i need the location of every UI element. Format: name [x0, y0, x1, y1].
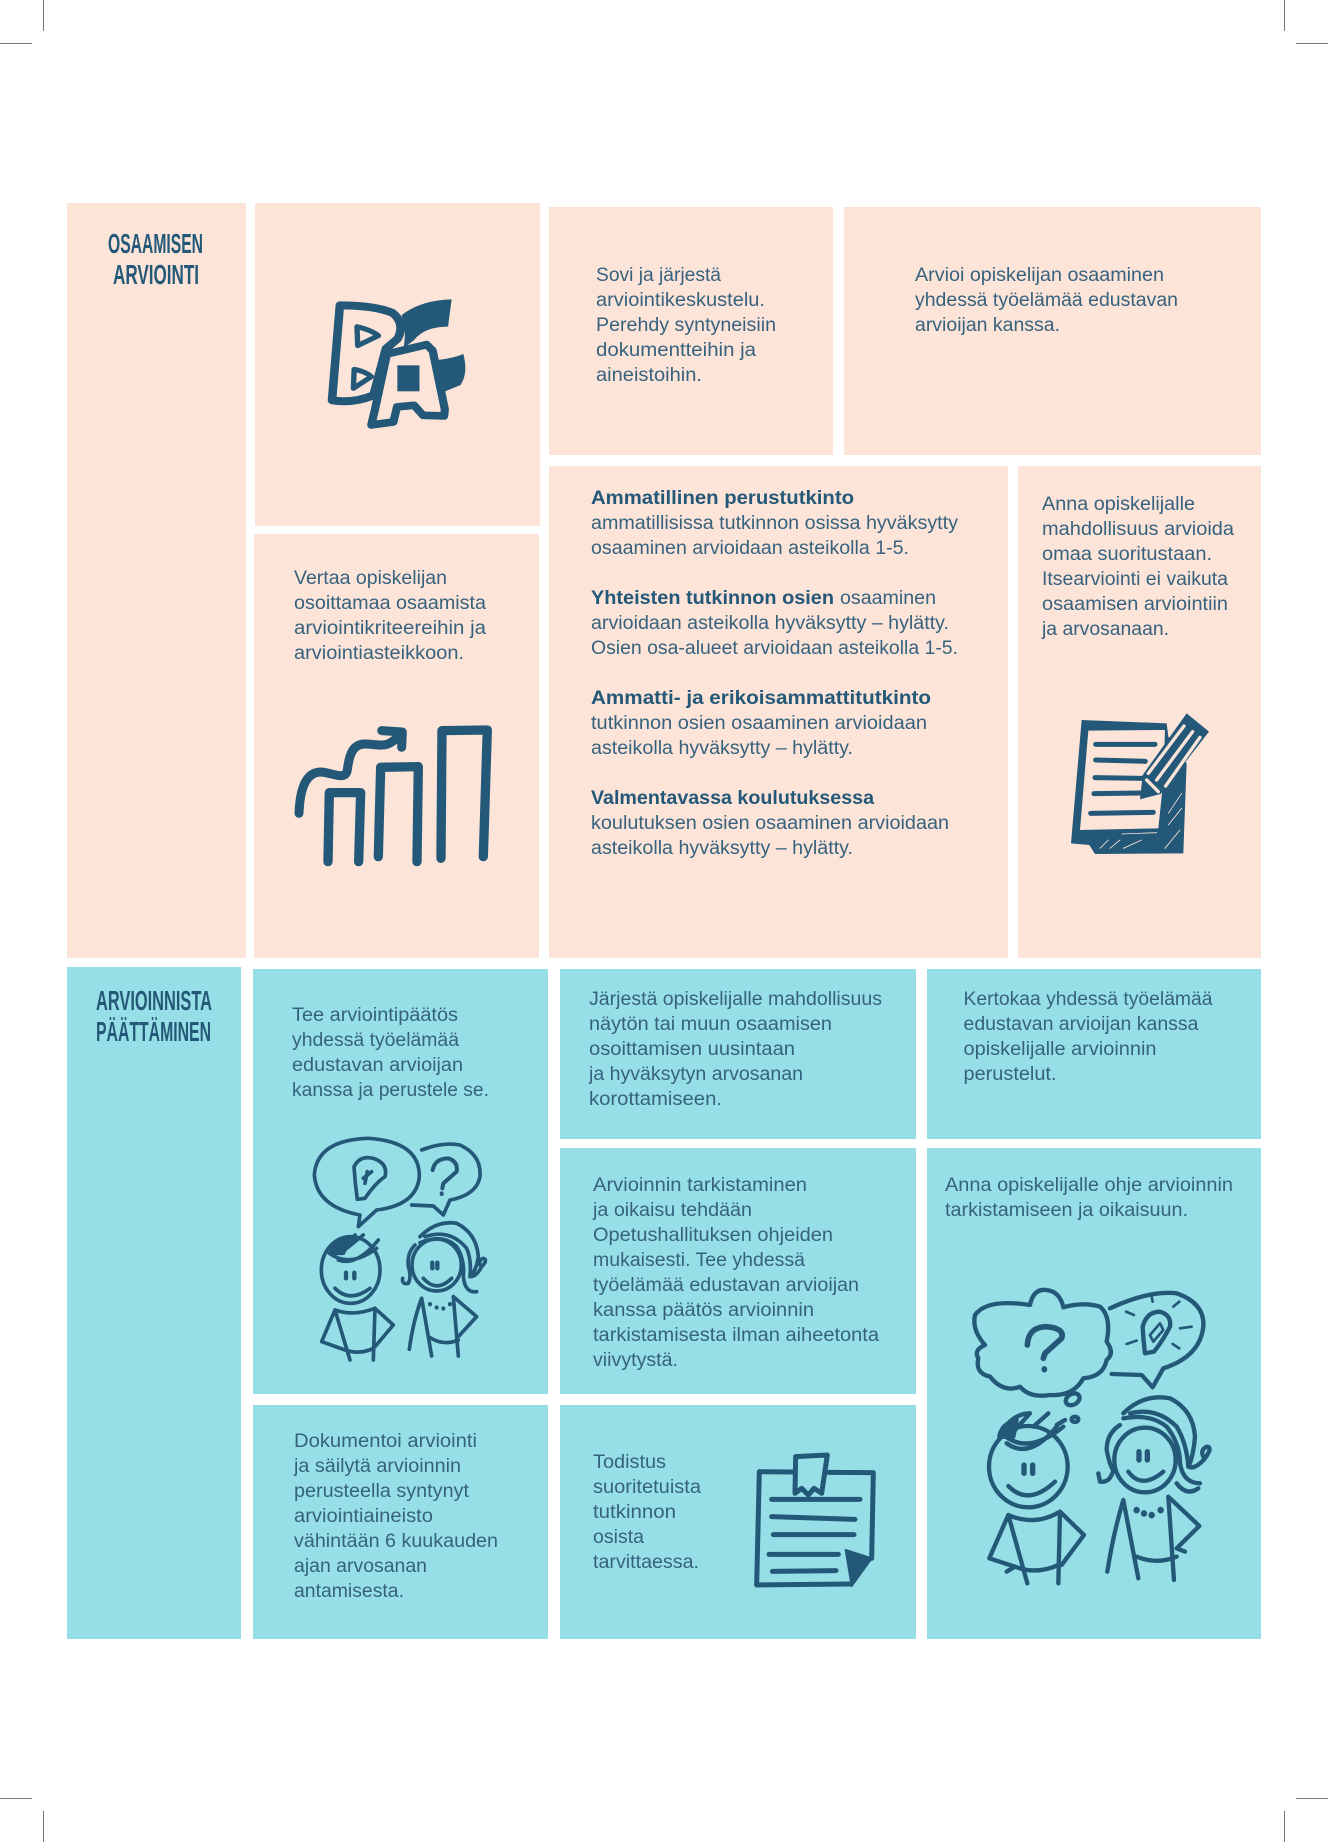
text: valmentava koulutus: koulutuksen osien osaaminen arvioidaan — [591, 813, 949, 834]
text: self-assessment: omaa suoritustaan. — [1042, 544, 1212, 565]
text: assess with working life representative: Arvioi opiskelijan osaaminen — [915, 265, 1164, 286]
text: certificate: osista — [593, 1527, 644, 1548]
text: review and correction of assessment: työelämää edustavan arvioijan — [593, 1275, 859, 1296]
text: ammatti- ja erikoisammattitutkinto — [591, 688, 931, 759]
text: document and retain assessment material: ajan arvosanan — [294, 1556, 427, 1577]
text: guidance on review and correction: tarkistamiseen ja oikaisuun. — [945, 1200, 1188, 1221]
text: agree on assessment discussion: Perehdy syntyneisiin — [596, 315, 776, 336]
text: agree on assessment discussion: Sovi ja järjestä — [596, 265, 721, 286]
panel: document and retain assessment material — [253, 1405, 548, 1639]
text: guidance on review and correction — [945, 1175, 1233, 1221]
text: make assessment decision: edustavan arvioijan — [292, 1055, 463, 1076]
text: document and retain assessment material — [293, 1431, 498, 1602]
text: ammatillinen perustutkinto — [591, 488, 959, 559]
text: make assessment decision: Tee arviointipäätös — [292, 1005, 458, 1026]
text: certificate: Todistus — [593, 1452, 666, 1473]
text: certificate: suoritetuista — [593, 1477, 701, 1498]
text: valmentava koulutus: asteikolla hyväksytty – hylätty. — [591, 838, 853, 859]
heading: osaamisen arviointi: OSAAMISEN — [108, 228, 203, 259]
icon: certificate document with ribbon — [757, 1455, 873, 1586]
panel: re-demonstration opportunity — [560, 969, 916, 1139]
text: ammatti- ja erikoisammattitutkinto: asteikolla hyväksytty – hylätty. — [591, 738, 853, 759]
text: explain grounds: Kertokaa yhdessä työelämää — [964, 989, 1213, 1010]
text: certificate — [593, 1452, 701, 1573]
text: yhteiset tutkinnon osat — [591, 588, 958, 659]
text: review and correction of assessment — [592, 1175, 879, 1371]
icon: letters B and A — [332, 299, 465, 425]
panel: compare to criteria — [254, 534, 539, 958]
text: agree on assessment discussion: dokumentteihin ja — [596, 340, 756, 361]
heading: arvioinnista paattaminen: PÄÄTTÄMINEN — [96, 1016, 211, 1047]
icon: notepad and pencil — [1071, 713, 1209, 854]
panel: guidance on review and correction — [927, 1148, 1261, 1639]
panel: explain grounds — [927, 969, 1261, 1139]
text: document and retain assessment material: antamisesta. — [294, 1581, 404, 1602]
text: document and retain assessment material: perusteella syntynyt — [294, 1481, 470, 1502]
panel: certificate — [560, 1405, 916, 1639]
text: guidance on review and correction: Anna opiskelijalle ohje arvioinnin — [945, 1175, 1233, 1196]
icon: rising bar chart with arrow — [299, 730, 487, 862]
heading: arvioinnista paattaminen: ARVIOINNISTA — [96, 985, 212, 1016]
text: review and correction of assessment: tarkistamisesta ilman aiheetonta — [593, 1325, 879, 1346]
text: document and retain assessment material: arviointiaineisto — [294, 1506, 433, 1527]
icon: two people with thought and speech bubbles — [974, 1290, 1210, 1583]
text: ammatillinen perustutkinto: Ammatillinen perustutkinto — [591, 488, 854, 509]
text: assess with working life representative: arvioijan kanssa. — [915, 315, 1060, 336]
text: self-assessment: mahdollisuus arvioida — [1042, 519, 1234, 540]
text: explain grounds: edustavan arvioijan kanssa — [964, 1014, 1199, 1035]
panel: self-assessment — [1018, 466, 1261, 958]
text: review and correction of assessment: ja oikaisu tehdään — [592, 1200, 752, 1221]
text: review and correction of assessment: kanssa päätös arvioinnin — [593, 1300, 814, 1321]
text: review and correction of assessment: mukaisesti. Tee yhdessä — [593, 1250, 805, 1271]
text: compare to criteria — [294, 568, 486, 664]
text: explain grounds: perustelut. — [964, 1064, 1056, 1085]
text: document and retain assessment material: Dokumentoi arviointi — [294, 1431, 477, 1452]
text: ammatillinen perustutkinto: osaaminen arvioidaan asteikolla 1-5. — [591, 538, 909, 559]
text: review and correction of assessment: Opetushallituksen ohjeiden — [593, 1225, 833, 1246]
text: agree on assessment discussion — [596, 265, 776, 386]
text: self-assessment — [1041, 494, 1234, 640]
panel: grade letters icon — [255, 203, 540, 526]
text: assess with working life representative — [915, 265, 1178, 336]
panel: agree on assessment discussion — [549, 207, 833, 455]
text: explain grounds — [964, 989, 1213, 1085]
panel: osaamisen arviointi heading — [67, 203, 246, 958]
text: re-demonstration opportunity: ja hyväksytyn arvosanan — [588, 1064, 803, 1085]
text: document and retain assessment material: ja säilytä arvioinnin — [293, 1456, 461, 1477]
panel: assess with working life representative — [844, 207, 1261, 455]
text: compare to criteria: Vertaa opiskelijan — [294, 568, 447, 589]
text: valmentava koulutus: Valmentavassa koulutuksessa — [591, 788, 874, 809]
text: ammatti- ja erikoisammattitutkinto: Ammatti- ja erikoisammattitutkinto — [591, 688, 931, 709]
heading: osaamisen arviointi: ARVIOINTI — [113, 259, 199, 290]
text: agree on assessment discussion: aineistoihin. — [596, 365, 702, 386]
text: valmentava koulutus — [591, 788, 949, 859]
icon: two people with speech bubbles — [314, 1138, 485, 1360]
text: certificate: tarvittaessa. — [593, 1552, 699, 1573]
text: explain grounds: opiskelijalle arvioinnin — [964, 1039, 1156, 1060]
text: yhteiset tutkinnon osat: Osien osa-alueet arvioidaan asteikolla 1-5. — [591, 638, 958, 659]
text: ammatti- ja erikoisammattitutkinto: tutkinnon osien osaaminen arvioidaan — [591, 713, 927, 734]
panel: grading scales by qualification — [549, 466, 1008, 958]
text: yhteiset tutkinnon osat: osaaminen — [840, 588, 936, 609]
text: make assessment decision — [292, 1005, 489, 1101]
text: make assessment decision: yhdessä työelämää — [292, 1030, 459, 1051]
panel: arvioinnista paattaminen heading — [67, 967, 241, 1639]
text: re-demonstration opportunity: osoittamisen uusintaan — [589, 1039, 795, 1060]
panel: make assessment decision — [253, 969, 548, 1394]
text: review and correction of assessment: Arvioinnin tarkistaminen — [593, 1175, 807, 1196]
heading: arvioinnista paattaminen — [96, 985, 212, 1047]
text: compare to criteria: osoittamaa osaamista — [294, 593, 486, 614]
text: yhteiset tutkinnon osat: Yhteisten tutkinnon osien — [591, 588, 834, 609]
text: review and correction of assessment: viivytystä. — [593, 1350, 678, 1371]
text: self-assessment: Anna opiskelijalle — [1042, 494, 1195, 515]
text: assess with working life representative: yhdessä työelämää edustavan — [915, 290, 1178, 311]
text: re-demonstration opportunity: näytön tai muun osaamisen — [589, 1014, 832, 1035]
text: make assessment decision: kanssa ja perustele se. — [292, 1080, 489, 1101]
text: re-demonstration opportunity: Järjestä opiskelijalle mahdollisuus — [589, 989, 882, 1010]
text: document and retain assessment material: vähintään 6 kuukauden — [294, 1531, 498, 1552]
panel: review and correction of assessment — [560, 1148, 916, 1394]
text: compare to criteria: arviointiasteikkoon. — [294, 643, 464, 664]
heading: osaamisen arviointi — [108, 228, 203, 290]
text: self-assessment: Itsearviointi ei vaikuta — [1042, 569, 1228, 590]
text: certificate: tutkinnon — [593, 1502, 676, 1523]
text: agree on assessment discussion: arviointikeskustelu. — [596, 290, 765, 311]
text: ammatillinen perustutkinto: ammatillisissa tutkinnon osissa hyväksytty — [591, 513, 959, 534]
text: self-assessment: ja arvosanaan. — [1041, 619, 1169, 640]
text: yhteiset tutkinnon osat: arvioidaan asteikolla hyväksytty – hylätty. — [591, 613, 949, 634]
text: compare to criteria: arviointikriteereihin ja — [294, 618, 486, 639]
text: self-assessment: osaamisen arviointiin — [1042, 594, 1228, 615]
text: re-demonstration opportunity: korottamiseen. — [589, 1089, 722, 1110]
text: re-demonstration opportunity — [588, 989, 882, 1110]
